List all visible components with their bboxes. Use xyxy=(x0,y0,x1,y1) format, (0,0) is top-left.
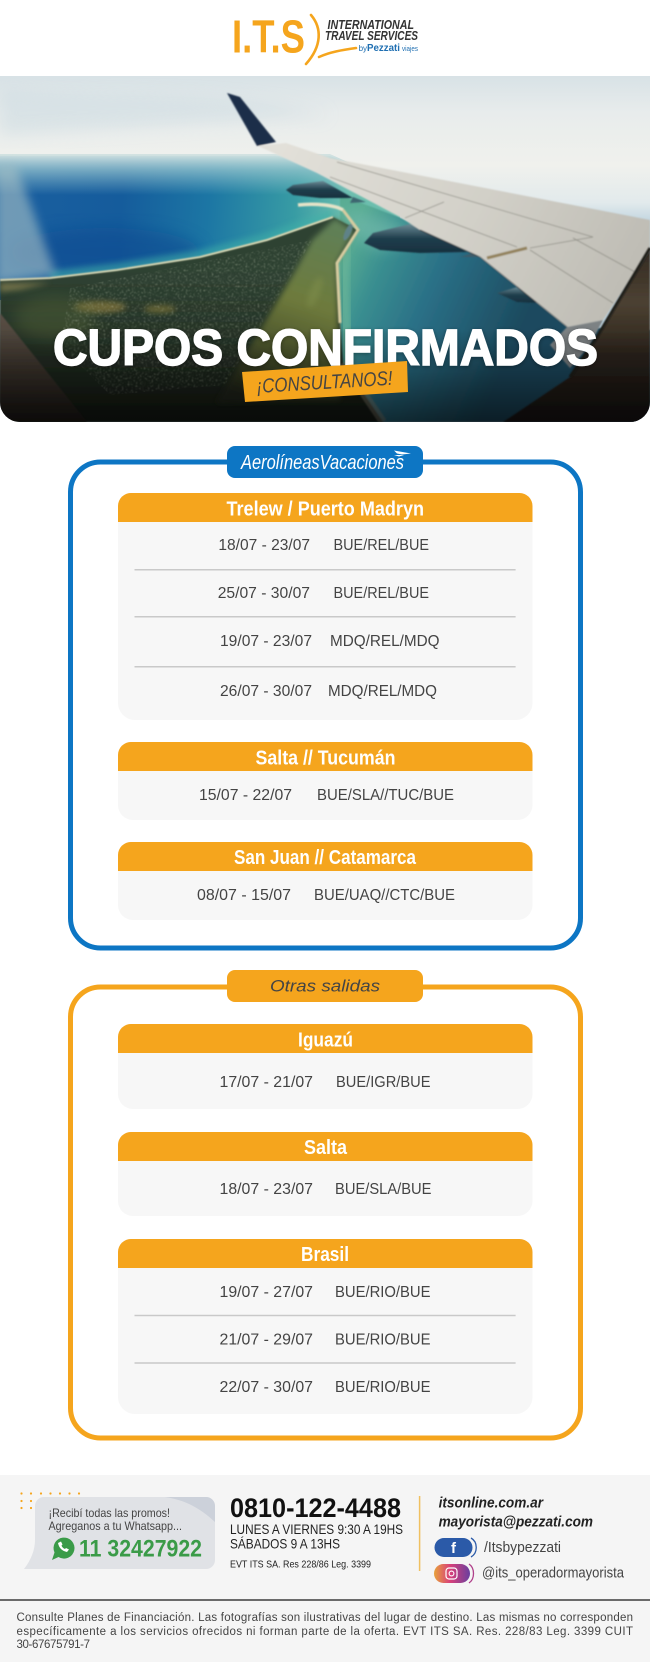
instagram contact xyxy=(434,1564,625,1583)
table: San Juan // Catamarca xyxy=(118,842,532,920)
tag: consultanos: ¡CONSULTANOS! xyxy=(256,368,393,398)
icon: whatsapp xyxy=(52,1538,75,1560)
table: Brasil: BUE/RIO/BUE xyxy=(335,1379,430,1396)
table: San Juan // Catamarca: San Juan // Catamarca xyxy=(234,847,417,869)
table: Salta: BUE/SLA/BUE xyxy=(335,1181,432,1198)
table: Salta // Tucumán: BUE/SLA//TUC/BUE xyxy=(317,787,454,804)
legal text xyxy=(16,1612,633,1651)
logo name line 1: INTERNATIONAL xyxy=(328,18,414,32)
whatsapp bubble: 11 32427922 xyxy=(79,1536,202,1563)
tag: consultanos xyxy=(242,361,408,402)
whatsapp bubble: ¡Recibí todas las promos! xyxy=(48,1506,170,1520)
table: Brasil: 22/07 - 30/07 xyxy=(220,1379,313,1396)
table: Trelew / Puerto Madryn: Trelew / Puerto Madryn xyxy=(226,499,424,521)
logo swoosh xyxy=(306,15,356,64)
table: Salta: 18/07 - 23/07 xyxy=(220,1181,313,1198)
panel: Otras salidas xyxy=(70,970,580,1438)
table: Salta xyxy=(118,1132,532,1216)
hero photo: airplane wing over coast xyxy=(0,76,650,422)
table: San Juan // Catamarca: 08/07 - 15/07 xyxy=(197,887,291,904)
badge: Aerolíneas Vacaciones xyxy=(227,446,423,478)
table: Trelew / Puerto Madryn: BUE/REL/BUE xyxy=(334,537,429,554)
phone and schedule: 0810-122-4488 xyxy=(230,1493,401,1523)
phone and schedule: EVT ITS SA. Res 228/86 Leg. 3399 xyxy=(230,1560,371,1571)
badge: Otras salidas xyxy=(227,970,423,1002)
table: Trelew / Puerto Madryn: 18/07 - 23/07 xyxy=(218,537,310,554)
table: Iguazú xyxy=(118,1024,532,1109)
table: Trelew / Puerto Madryn: 19/07 - 23/07 xyxy=(220,633,312,650)
whatsapp bubble: Agreganos a tu Whatsapp... xyxy=(48,1519,182,1533)
facebook contact: /Itsbypezzati xyxy=(484,1540,561,1556)
decorative orange dots xyxy=(20,1492,80,1509)
footer xyxy=(0,1475,650,1662)
phone and schedule: LUNES A VIERNES 9:30 A 19HS xyxy=(230,1521,403,1537)
facebook contact: f xyxy=(451,1540,457,1557)
logo: I.T.S International Travel Services xyxy=(232,11,419,64)
table: San Juan // Catamarca: BUE/UAQ//CTC/BUE xyxy=(314,887,455,904)
table: Salta // Tucumán xyxy=(118,742,532,820)
table: Trelew / Puerto Madryn xyxy=(118,493,532,720)
table: Trelew / Puerto Madryn: MDQ/REL/MDQ xyxy=(328,683,437,700)
logo by Pezzati viajes: by xyxy=(359,44,367,53)
table: Brasil xyxy=(118,1239,532,1414)
table: Salta // Tucumán: Salta // Tucumán xyxy=(256,748,396,770)
table: Trelew / Puerto Madryn: 25/07 - 30/07 xyxy=(218,585,310,602)
logo name line 2: TRAVEL SERVICES xyxy=(325,29,419,43)
facebook contact xyxy=(434,1538,561,1557)
web and email xyxy=(439,1495,593,1531)
phone and schedule: SÁBADOS 9 A 13HS xyxy=(230,1536,340,1552)
phone and schedule xyxy=(230,1493,403,1571)
panel: Aerolíneas Vacaciones xyxy=(70,446,580,948)
web and email: mayorista@pezzati.com xyxy=(439,1514,593,1531)
table: Iguazú: Iguazú xyxy=(298,1030,353,1052)
badge: Otras salidas: Otras salidas xyxy=(270,976,381,996)
table: Brasil: Brasil xyxy=(301,1244,349,1266)
web and email: itsonline.com.ar xyxy=(439,1495,544,1512)
table: Trelew / Puerto Madryn: BUE/REL/BUE xyxy=(334,585,429,602)
badge: Aerolíneas Vacaciones: AerolíneasVacaciones xyxy=(240,452,404,474)
table: Iguazú: 17/07 - 21/07 xyxy=(220,1074,313,1091)
logo letters: I.T.S xyxy=(232,11,305,63)
table: Brasil: 21/07 - 29/07 xyxy=(220,1332,313,1349)
legal text: Consulte Planes de Financiación. Las fotografías son ilustrativas del lugar de destino. Las mismas no corresponden xyxy=(16,1612,633,1624)
instagram contact: @its_operadormayorista xyxy=(482,1566,625,1582)
table: Brasil: BUE/RIO/BUE xyxy=(335,1332,430,1349)
whatsapp bubble xyxy=(24,1497,215,1569)
legal text: 30-67675791-7 xyxy=(16,1639,90,1651)
table: Trelew / Puerto Madryn: MDQ/REL/MDQ xyxy=(330,633,440,650)
legal text: específicamente a los servicios ofrecidos ni forman parte de la oferta. EVT ITS SA. Res. 228/83 Leg. 3399 CUIT xyxy=(16,1626,633,1638)
table: Brasil: BUE/RIO/BUE xyxy=(335,1284,430,1301)
logo Pezzati: Pezzati xyxy=(367,42,400,54)
table: Brasil: 19/07 - 27/07 xyxy=(220,1284,313,1301)
table: Iguazú: BUE/IGR/BUE xyxy=(336,1074,430,1091)
table: Salta // Tucumán: 15/07 - 22/07 xyxy=(199,787,292,804)
table: Salta: Salta xyxy=(304,1137,348,1159)
logo viajes: viajes xyxy=(402,44,418,53)
hero title: CUPOS CONFIRMADOS xyxy=(53,319,598,376)
table: Trelew / Puerto Madryn: 26/07 - 30/07 xyxy=(220,683,312,700)
